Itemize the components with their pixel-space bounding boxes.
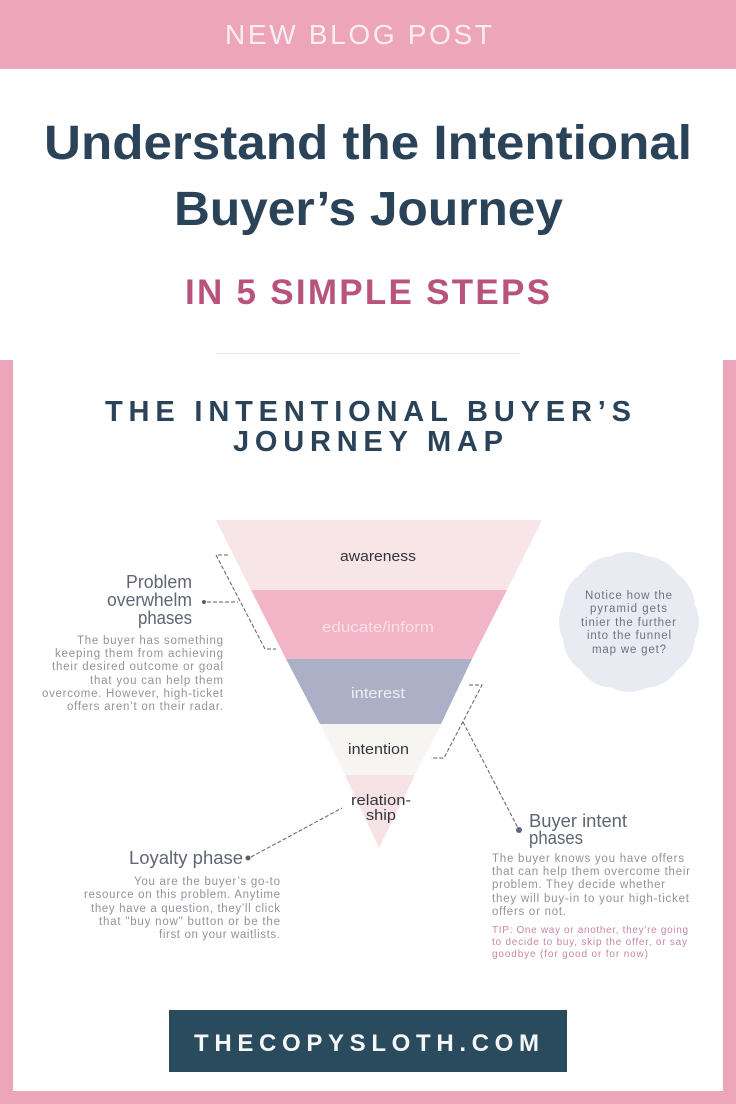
note blob: tinier the further: [581, 617, 676, 629]
footer website banner: THECOPYSLOTH.COM: [194, 1030, 539, 1057]
callout: problem overwhelm heading: Problem: [126, 572, 192, 592]
note blob: [545, 538, 713, 706]
callout: problem overwhelm text: [42, 635, 224, 713]
footer website banner: [169, 1010, 567, 1072]
funnel chart: [216, 520, 542, 848]
callout: loyalty heading: Loyalty phase: [129, 848, 243, 868]
title: [44, 117, 692, 236]
callout: buyer intent heading: phases: [529, 828, 583, 848]
funnel layer: relationship: relation-: [351, 792, 411, 809]
title: Understand the Intentional: [44, 117, 692, 170]
callout: problem overwhelm text: their desired outcome or goal: [52, 661, 223, 673]
callout: problem overwhelm heading: overwhelm: [107, 590, 192, 610]
callout: tip: goodbye (for good or for now): [492, 949, 648, 960]
callout: tip: TIP: One way or another, they’re going: [492, 925, 688, 936]
map heading: THE INTENTIONAL BUYER’S: [105, 396, 631, 428]
callout: loyalty text: that "buy now" button or be the: [99, 916, 280, 928]
callout: problem overwhelm heading: phases: [138, 608, 192, 628]
title: Buyer’s Journey: [174, 183, 563, 236]
callout: loyalty text: they have a question, they’ll click: [91, 903, 280, 915]
callout: problem overwhelm text: offers aren’t on their radar.: [67, 701, 223, 713]
funnel layer: interest: [286, 659, 472, 724]
top banner: [0, 0, 736, 69]
callout: problem overwhelm text: keeping them from achieving: [55, 648, 223, 660]
callout: problem overwhelm text: The buyer has something: [77, 635, 223, 647]
pink page frame: [0, 360, 736, 1104]
funnel layer: intention: [320, 724, 441, 775]
funnel layer: interest: interest: [351, 685, 406, 702]
callout: problem overwhelm heading: [107, 572, 192, 628]
funnel layer: awareness: [216, 520, 542, 590]
callout: problem overwhelm text: overcome. However, high-ticket: [42, 688, 224, 700]
callout: buyer intent text: problem. They decide whether: [492, 879, 665, 891]
note blob: pyramid gets: [590, 603, 667, 615]
callout: loyalty text: first on your waitlists.: [159, 929, 280, 941]
callout: buyer intent text: The buyer knows you have offers: [492, 853, 684, 865]
callout: buyer intent text: offers or not.: [492, 906, 566, 918]
funnel layer: relationship: [345, 775, 415, 848]
funnel layer: intention: intention: [348, 741, 409, 758]
map heading: JOURNEY MAP: [233, 426, 503, 458]
note blob: into the funnel: [587, 630, 671, 642]
funnel layer: awareness: awareness: [340, 548, 416, 565]
callout: loyalty text: resource on this problem. Anytime: [84, 889, 280, 901]
callout: problem overwhelm text: that you can help them: [90, 675, 223, 687]
callout: buyer intent heading: [529, 811, 627, 848]
funnel layer: relationship: ship: [366, 807, 396, 824]
subtitle: IN 5 SIMPLE STEPS: [185, 273, 550, 312]
callout: buyer intent connector: [431, 685, 522, 833]
callout: tip: to decide to buy, skip the offer, or say: [492, 937, 687, 948]
banner text: NEW BLOG POST: [225, 19, 492, 50]
callout: buyer intent text: that can help them overcome their: [492, 866, 690, 878]
funnel layer: educate/inform: educate/inform: [322, 619, 434, 636]
callout: loyalty connector: [246, 808, 342, 860]
callout: loyalty text: You are the buyer’s go-to: [134, 876, 280, 888]
callout: loyalty text: [84, 876, 280, 941]
note blob: map we get?: [592, 644, 666, 656]
callout: problem overwhelm connector: [202, 555, 276, 649]
map heading: [105, 396, 631, 458]
note blob: Notice how the: [585, 590, 672, 602]
callout: buyer intent heading: Buyer intent: [529, 811, 627, 831]
callout: buyer intent text: [492, 853, 690, 918]
callout: buyer intent text: they will buy-in to your high-ticket: [492, 893, 690, 905]
funnel layer: educate/inform: [251, 590, 507, 659]
callout: tip: [492, 925, 688, 960]
